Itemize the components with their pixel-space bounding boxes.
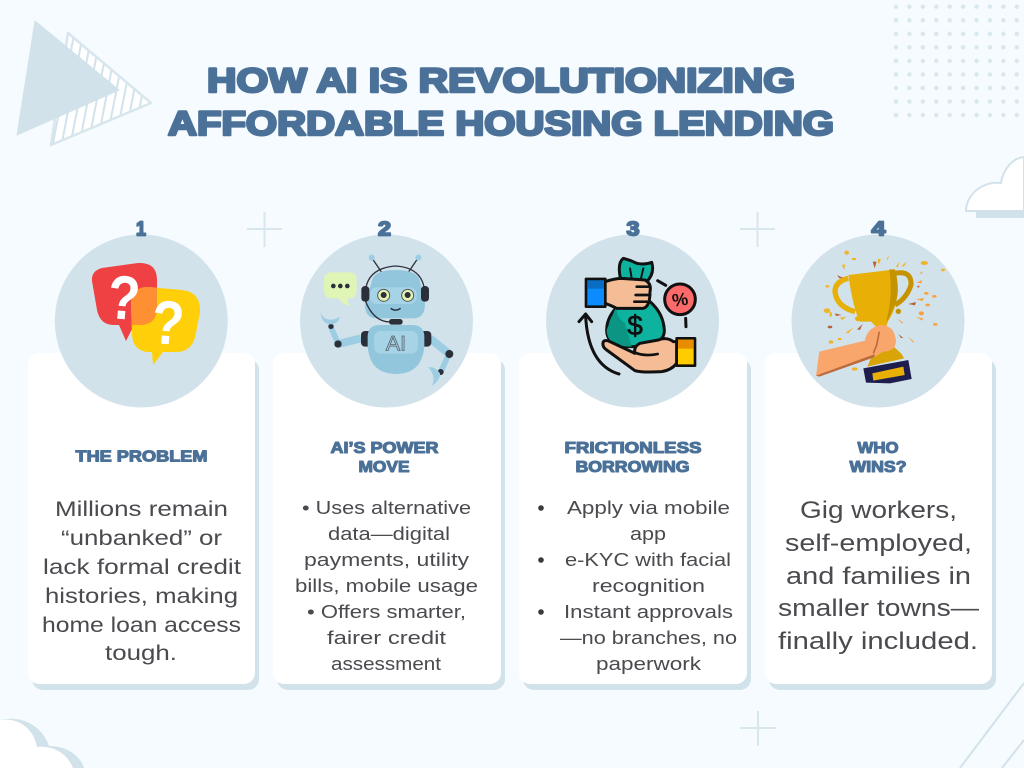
body text: recognition bbox=[592, 575, 705, 596]
decoration: bottom left cloud bbox=[0, 719, 84, 768]
heading bbox=[330, 440, 438, 476]
decoration: plus signs bbox=[247, 212, 776, 746]
body text: “unbanked” or bbox=[61, 527, 222, 550]
body text: home loan access bbox=[42, 614, 241, 637]
body text: tough. bbox=[105, 642, 177, 665]
card bbox=[273, 353, 501, 684]
body text bbox=[42, 498, 241, 665]
body text: payments, utility bbox=[304, 549, 470, 570]
heading: WHO bbox=[858, 440, 898, 457]
heading: THE PROBLEM bbox=[76, 448, 208, 466]
icon: robot bbox=[321, 255, 453, 386]
icon: robot: AI bbox=[386, 332, 406, 356]
icon: trophy in hand bbox=[816, 251, 945, 383]
body text bbox=[538, 497, 737, 674]
step number 2: 2 bbox=[378, 218, 391, 240]
card shadow bbox=[277, 359, 505, 690]
heading: BORROWING bbox=[576, 459, 690, 476]
body text: self-employed, bbox=[785, 530, 972, 557]
decoration: top right cloud bbox=[966, 157, 1024, 218]
heading: MOVE bbox=[358, 459, 410, 476]
icon: question bubbles bbox=[92, 263, 200, 365]
decoration: diagonal lines bbox=[960, 683, 1024, 768]
circle backdrop bbox=[546, 234, 719, 408]
heading bbox=[564, 440, 702, 476]
title: HOW AI IS REVOLUTIONIZING bbox=[207, 62, 795, 100]
body text: e-KYC with facial bbox=[565, 549, 731, 570]
title bbox=[168, 62, 834, 143]
icon: money bag and hands: % bbox=[671, 289, 689, 311]
body text: finally included. bbox=[778, 628, 978, 655]
card shadow bbox=[32, 359, 259, 690]
body text: data—digital bbox=[328, 523, 450, 544]
body text: assessment bbox=[331, 653, 441, 674]
panel: the problem bbox=[28, 218, 259, 690]
body text bbox=[778, 497, 979, 655]
panel: who wins bbox=[765, 218, 996, 690]
card bbox=[28, 353, 255, 684]
icon: question bubbles: ? bbox=[105, 263, 143, 334]
heading: WINS? bbox=[850, 459, 906, 476]
body text: • Offers smarter, bbox=[307, 601, 466, 622]
body text: bills, mobile usage bbox=[295, 575, 478, 596]
circle backdrop bbox=[55, 234, 228, 408]
body text: Gig workers, bbox=[800, 497, 957, 524]
panel: frictionless borrowing bbox=[519, 218, 751, 690]
step number 3: 3 bbox=[626, 218, 640, 240]
step number 4: 4 bbox=[872, 218, 887, 240]
decoration: dot grid bbox=[889, 0, 1024, 122]
body text: app bbox=[630, 523, 666, 544]
card bbox=[765, 353, 992, 684]
circle backdrop bbox=[792, 234, 964, 408]
body text: and families in bbox=[786, 563, 971, 590]
title: AFFORDABLE HOUSING LENDING bbox=[168, 105, 834, 143]
icon: money bag and hands bbox=[579, 258, 695, 374]
body text: Instant approvals bbox=[564, 601, 733, 622]
card shadow bbox=[523, 359, 751, 690]
body text: smaller towns— bbox=[778, 595, 979, 622]
body text: lack formal credit bbox=[43, 556, 241, 579]
heading: AI’S POWER bbox=[330, 440, 438, 457]
step number 1: 1 bbox=[136, 218, 146, 240]
heading bbox=[850, 440, 906, 476]
body text bbox=[295, 497, 478, 674]
icon: money bag and hands: $ bbox=[627, 310, 643, 341]
heading: FRICTIONLESS bbox=[564, 440, 702, 457]
body text: —no branches, no bbox=[560, 627, 737, 648]
body text: Millions remain bbox=[55, 498, 228, 521]
decoration: triangles bbox=[17, 21, 151, 145]
body text: paperwork bbox=[596, 653, 702, 674]
icon: question bubbles: ? bbox=[149, 288, 187, 359]
body text: histories, making bbox=[45, 585, 238, 608]
panel: AI's power move bbox=[273, 218, 505, 690]
circle backdrop bbox=[300, 234, 473, 408]
body text: Apply via mobile bbox=[567, 497, 730, 518]
body text: fairer credit bbox=[327, 627, 446, 648]
card shadow bbox=[769, 359, 996, 690]
card bbox=[519, 353, 747, 684]
body text: • Uses alternative bbox=[302, 497, 471, 518]
